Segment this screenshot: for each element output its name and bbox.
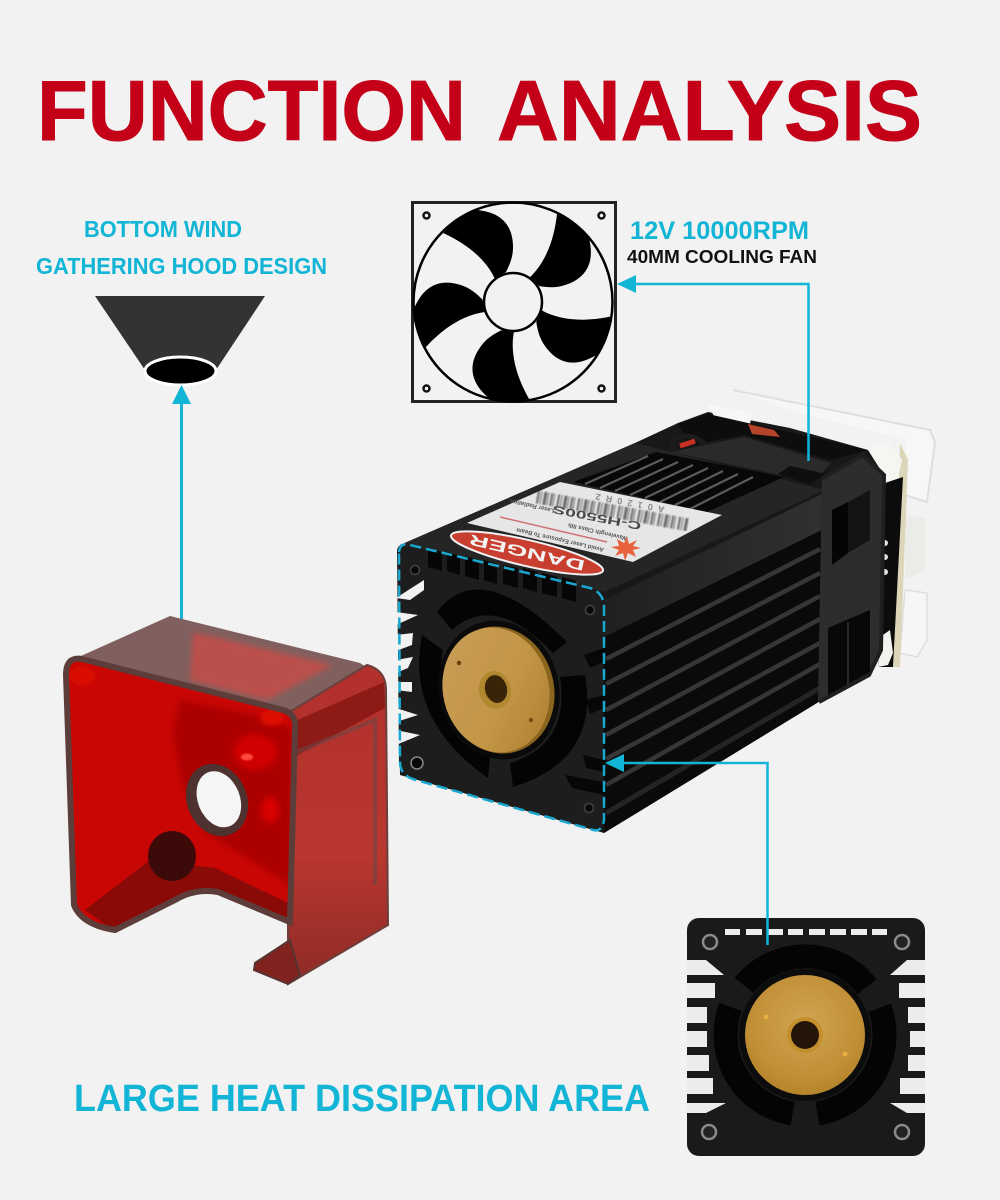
brass nozzle	[424, 608, 574, 772]
rear top standoff	[707, 404, 752, 424]
left fin gaps	[687, 960, 726, 1113]
danger badge	[448, 523, 606, 583]
label: bottom wind gathering hood design: BOTTOM WIND	[84, 216, 242, 242]
corner screws	[702, 935, 909, 1139]
top fin gaps	[725, 929, 887, 935]
front face	[396, 544, 604, 830]
cap hook	[254, 940, 300, 984]
cap right face inner frame	[297, 720, 375, 885]
specification lines: Wavelength Class IIIb	[567, 521, 629, 541]
cap lens hole	[175, 754, 259, 846]
cap front opening	[66, 659, 295, 930]
right fin gaps	[890, 960, 925, 1113]
danger badge: DANGER	[468, 530, 587, 574]
label: fan specification: 40MM COOLING FAN	[627, 247, 817, 267]
label: fan specification: 12V 10000RPM	[630, 217, 809, 245]
fan housing	[818, 455, 885, 702]
icon: cooling fan	[404, 202, 624, 418]
arrow: fan connector	[617, 275, 808, 461]
icon: wind hood	[95, 296, 265, 385]
barcode	[537, 497, 688, 525]
top fin notches	[428, 549, 576, 602]
label: fan specification	[627, 217, 817, 267]
laser warning star	[611, 537, 641, 561]
title	[37, 64, 922, 159]
laser module	[396, 390, 935, 833]
specification lines	[509, 497, 629, 552]
title: FUNCTION	[37, 64, 466, 159]
cap top surface	[72, 616, 385, 716]
cooling slots	[726, 956, 884, 1114]
left fin gaps	[396, 580, 424, 745]
fan top and wiring	[671, 414, 868, 484]
cap inner shading	[68, 667, 292, 932]
label: large heat dissipation area: LARGE HEAT DISSIPATION AREA	[74, 1078, 650, 1120]
brass nozzle	[745, 975, 865, 1095]
specification lines: Avoid Laser Exposure To Beam	[516, 526, 605, 552]
arrow: heat sink connector	[605, 754, 768, 945]
screw holes	[410, 566, 594, 812]
model number: C-H5500S	[552, 503, 642, 531]
specification lines: Laser Radiation	[509, 497, 555, 513]
cap knob	[148, 831, 196, 881]
label: bottom wind gathering hood design: GATHERING HOOD DESIGN	[36, 253, 327, 279]
top face	[400, 443, 825, 592]
cap front rim	[66, 659, 295, 930]
heat sink body	[398, 412, 885, 833]
black cooling slots	[419, 589, 587, 787]
title: ANALYSIS	[497, 64, 922, 159]
dashed outline	[399, 544, 604, 830]
front view of nozzle heat sink	[687, 918, 925, 1156]
arrow: hood to cap	[172, 385, 191, 638]
cap top inner panel	[190, 632, 333, 700]
cap right face	[288, 665, 388, 984]
label: bottom wind gathering hood design	[36, 216, 327, 279]
top vent slots	[573, 452, 784, 512]
right fin ends	[565, 648, 604, 795]
acrylic back plate and standoffs	[733, 390, 935, 667]
red protective cap	[66, 616, 388, 984]
serial number: A0120R2	[595, 491, 665, 515]
cap highlight	[241, 754, 253, 760]
cap right face upper band	[293, 682, 385, 756]
right side fins	[604, 494, 822, 833]
product label	[467, 482, 722, 562]
